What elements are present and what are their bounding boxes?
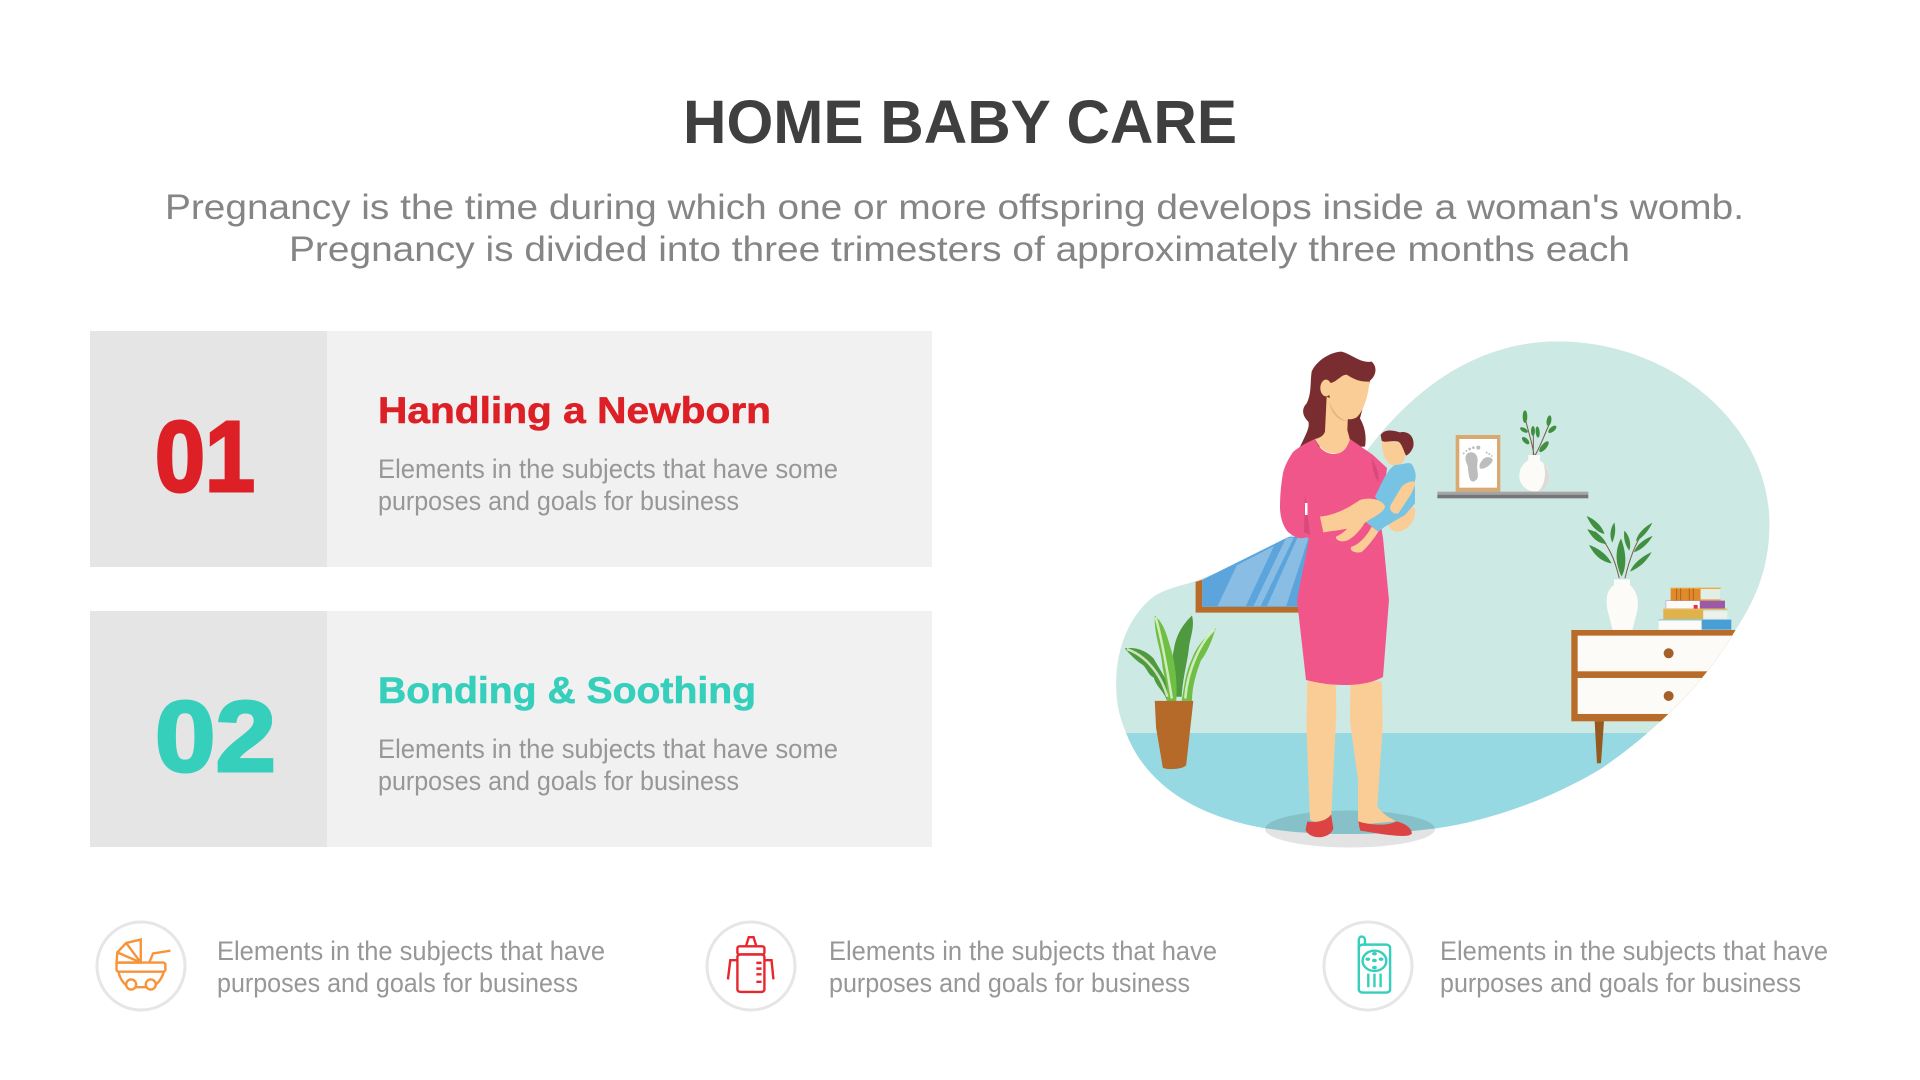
dress shadow folds — [1304, 458, 1379, 535]
heading: handling a newborn: Handling a Newborn — [378, 390, 771, 431]
description: purposes and goals for business — [378, 486, 739, 516]
description — [378, 454, 838, 516]
subtitle — [165, 188, 1744, 269]
panel: bonding and soothing — [90, 611, 932, 847]
text: Elements in the subjects that have — [1440, 936, 1828, 966]
neck and face — [1315, 375, 1369, 454]
woman — [1280, 352, 1416, 837]
feature: stroller — [97, 922, 605, 1010]
icon: baby monitor — [1324, 922, 1412, 1010]
room background blob — [1116, 341, 1770, 834]
vase with plant — [1587, 516, 1731, 630]
books — [1659, 588, 1731, 630]
text: Elements in the subjects that have — [217, 936, 605, 966]
subtitle: Pregnancy is the time during which one or more offspring develops inside a woman's womb. — [165, 188, 1744, 227]
shelf with photo frame and small vase — [1437, 410, 1588, 498]
text — [829, 936, 1217, 998]
text — [217, 936, 605, 998]
dress — [1280, 439, 1389, 685]
description: purposes and goals for business — [378, 766, 739, 796]
subtitle: Pregnancy is divided into three trimesters of approximately three months each — [289, 230, 1630, 269]
text: purposes and goals for business — [217, 968, 578, 998]
icon: bottle — [707, 922, 795, 1010]
legs and shoes — [1306, 681, 1412, 837]
baby — [1320, 431, 1416, 553]
hair — [1300, 352, 1375, 447]
text: purposes and goals for business — [829, 968, 1190, 998]
title: HOME BABY CARE — [683, 88, 1237, 156]
dresser — [1571, 630, 1736, 764]
description: Elements in the subjects that have some — [378, 734, 838, 764]
floor shadow — [1265, 810, 1435, 848]
panel: handling a newborn — [90, 331, 932, 567]
number 01: 01 — [155, 401, 255, 513]
description — [378, 734, 838, 796]
feature: baby monitor — [1324, 922, 1828, 1010]
text — [1440, 936, 1828, 998]
illustration: mother holding baby in room — [1116, 341, 1770, 848]
icon: stroller — [97, 922, 185, 1010]
plant in pot — [1125, 615, 1216, 769]
feature: bottle — [707, 922, 1217, 1010]
window — [1196, 537, 1311, 613]
number 02: 02 — [155, 681, 276, 793]
text: purposes and goals for business — [1440, 968, 1801, 998]
dresser with vase and books — [1571, 516, 1736, 764]
text: Elements in the subjects that have — [829, 936, 1217, 966]
description: Elements in the subjects that have some — [378, 454, 838, 484]
heading: bonding and soothing: Bonding & Soothing — [378, 670, 756, 711]
